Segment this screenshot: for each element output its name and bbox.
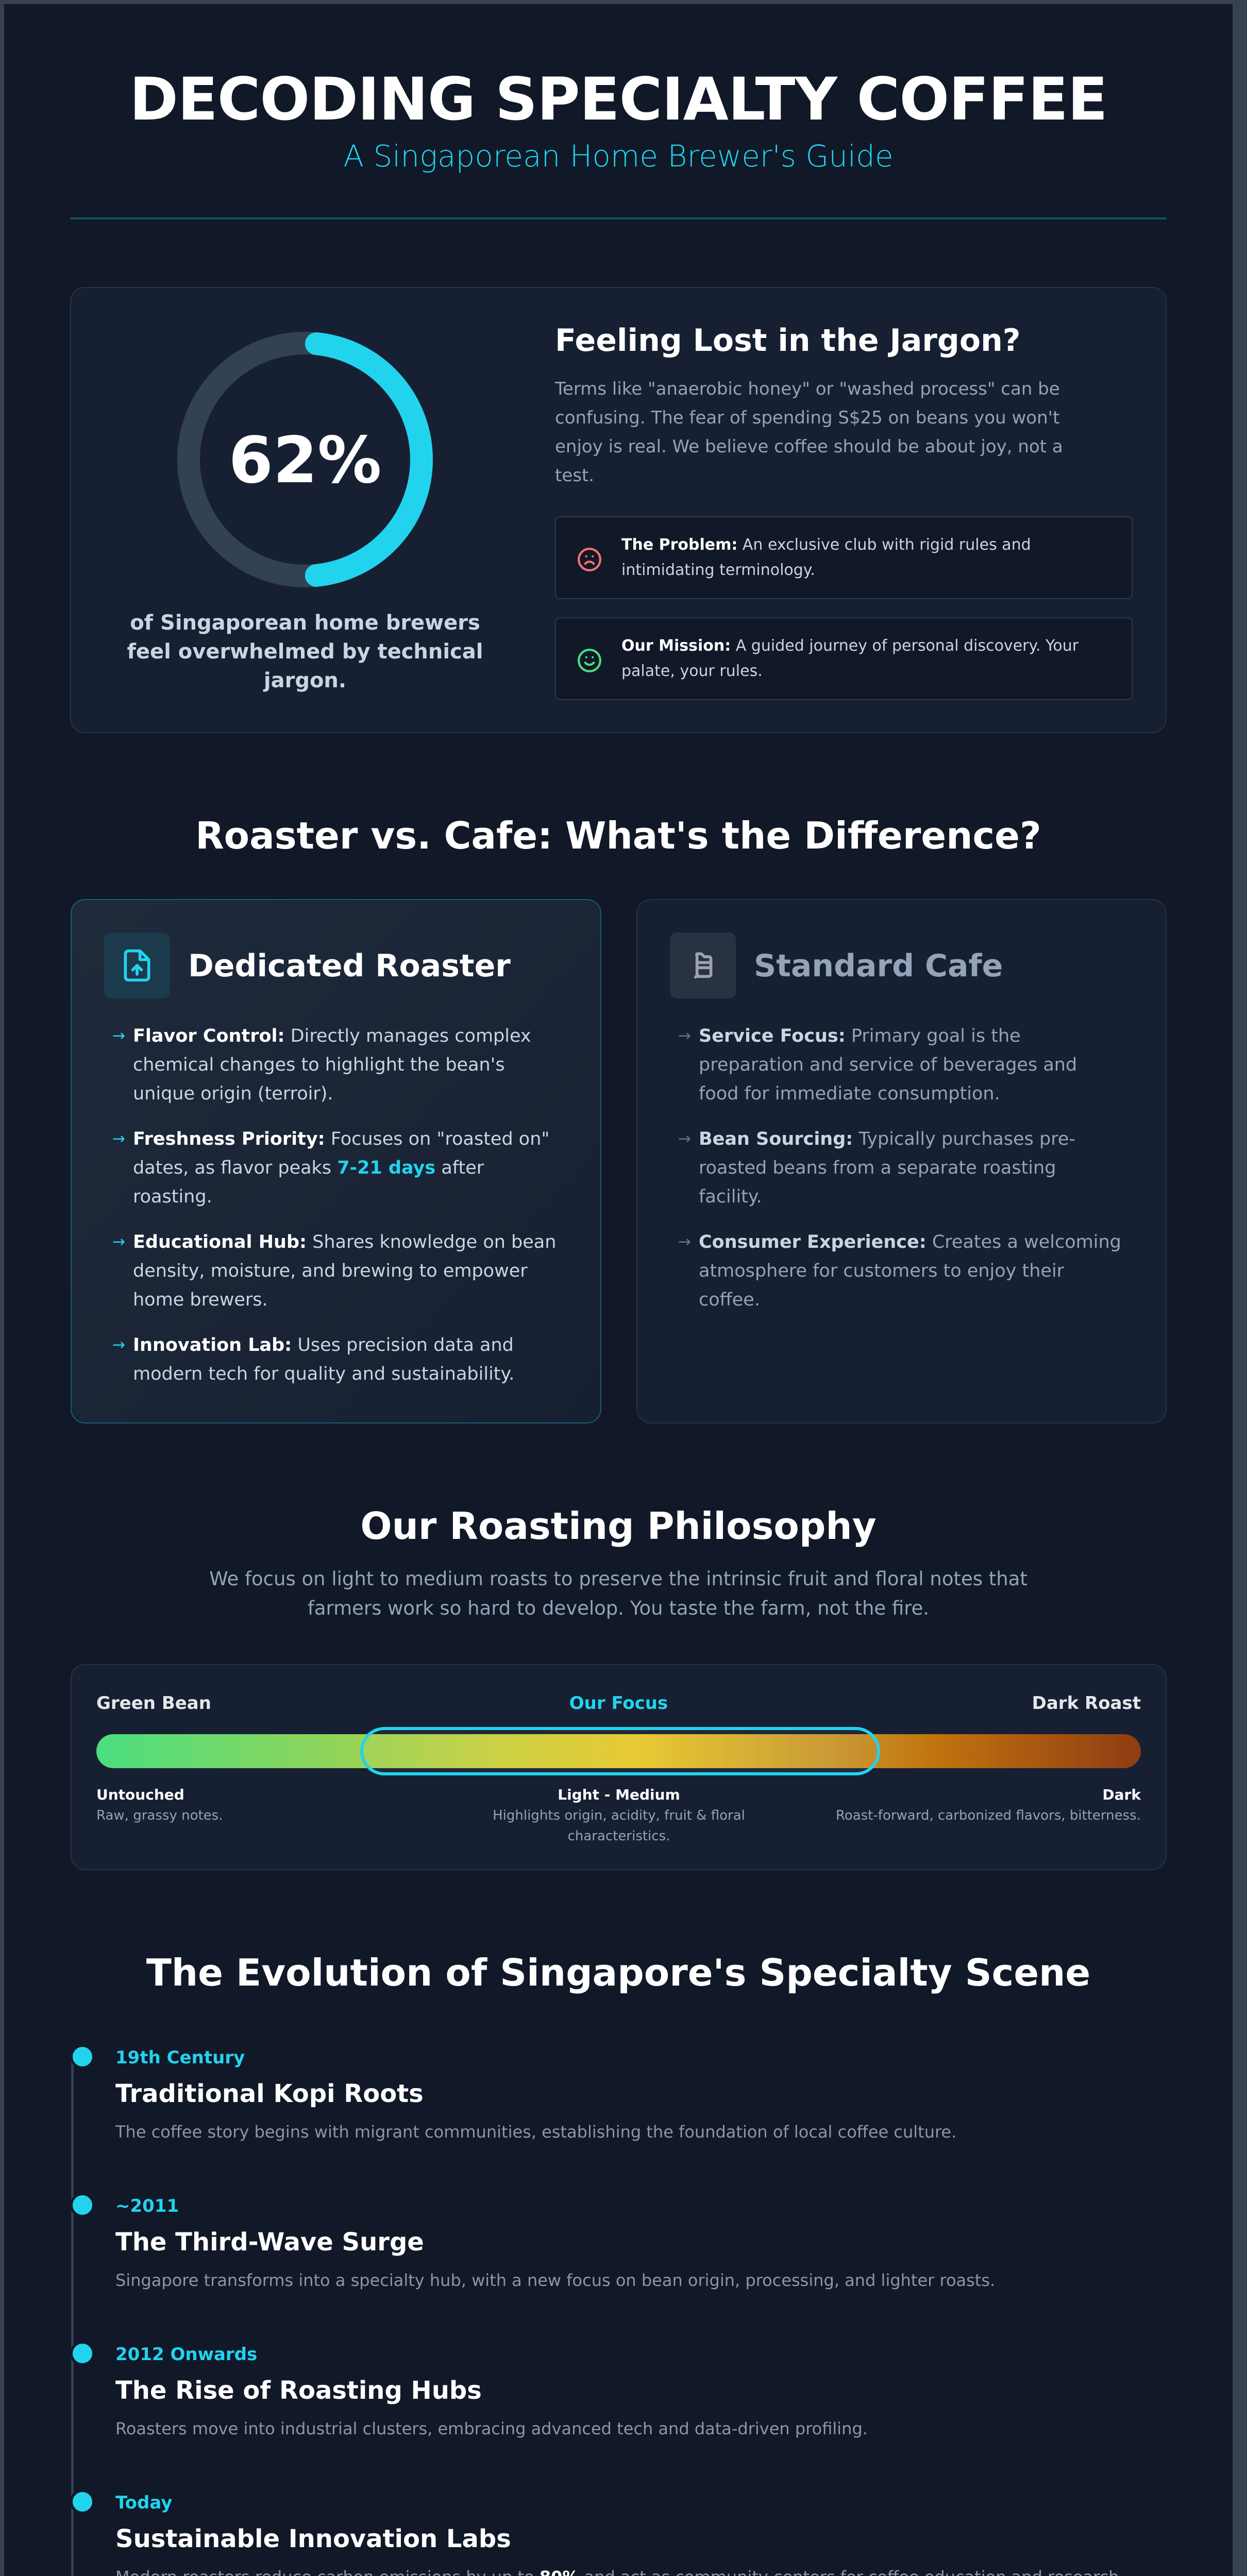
panel: dedicated roaster xyxy=(71,899,601,1423)
label: dark: Roast-forward, carbonized flavors, bitterness. xyxy=(836,1808,1141,1823)
cafe bullet list: atmosphere for customers to enjoy their xyxy=(699,1261,1064,1281)
label: untouched: Untouched xyxy=(96,1786,184,1803)
cafe bullet list: facility. xyxy=(699,1187,762,1207)
panel: jargon stats xyxy=(70,287,1167,733)
timeline item: 19th century xyxy=(71,2047,956,2142)
timeline xyxy=(71,2047,1124,2576)
heading: roasting philosophy: Our Roasting Philosophy xyxy=(360,1504,877,1548)
stat caption: of Singaporean home brewers feel overwhelmed by technical jargon. xyxy=(127,611,483,692)
heading: dedicated roaster: Dedicated Roaster xyxy=(188,948,511,984)
roaster bullet list: Freshness Priority: Focuses on "roasted on" dates, as flavor peaks 7-21 days after roasting. xyxy=(133,1129,549,1207)
cafe bullet list: Bean Sourcing: Typically purchases pre- xyxy=(699,1129,1075,1149)
cafe bullet list: → xyxy=(678,1233,691,1251)
label: untouched: Raw, grassy notes. xyxy=(96,1808,223,1823)
cafe bullet list: → xyxy=(678,1027,691,1045)
timeline item: 2012 onwards: 2012 Onwards xyxy=(115,2344,257,2365)
timeline item: 2011: ~2011 xyxy=(115,2196,179,2216)
heading: evolution: The Evolution of Singapore's Specialty Scene xyxy=(146,1951,1090,1994)
roaster bullet list xyxy=(112,1026,556,1384)
roaster bullet list: → xyxy=(112,1027,125,1045)
cafe bullet list: coffee. xyxy=(699,1290,760,1310)
roaster bullet list: Innovation Lab: Uses precision data and modern tech for quality and sustainability. xyxy=(133,1335,514,1384)
label: dark xyxy=(836,1786,1141,1823)
roaster bullet list: Flavor Control: Directly manages complex chemical changes to highlight the bean's unique origin (terroir). xyxy=(133,1026,531,1104)
donut chart 62% xyxy=(177,332,433,587)
label: untouched xyxy=(96,1786,223,1823)
icon: sad face xyxy=(578,548,601,571)
callout: mission: Our Mission: A guided journey of personal discovery. Your palate, your rules. xyxy=(621,637,1079,680)
timeline item: 2012 onwards xyxy=(71,2344,868,2438)
cafe bullet list xyxy=(678,1026,1121,1310)
callout: mission xyxy=(555,617,1133,700)
timeline item: 2011: Singapore transforms into a specialty hub, with a new focus on bean origin, processing, and lighter roasts. xyxy=(115,2270,995,2290)
icon: smile face xyxy=(578,649,601,672)
subtitle: A Singaporean Home Brewer's Guide xyxy=(343,139,894,174)
cafe bullet list: roasted beans from a separate roasting xyxy=(699,1158,1056,1178)
spectrum labels: Our Focus xyxy=(569,1693,668,1714)
roaster bullet list: Educational Hub: Shares knowledge on bean density, moisture, and brewing to empower home brewers. xyxy=(133,1232,556,1310)
timeline item: 2011 xyxy=(71,2195,995,2290)
spectrum labels xyxy=(96,1693,1141,1714)
timeline item: 2011: The Third-Wave Surge xyxy=(115,2228,424,2257)
timeline item: today xyxy=(71,2492,1124,2576)
label: light-medium xyxy=(493,1786,745,1844)
roast gradient bar xyxy=(96,1734,1141,1768)
timeline item: 2012 onwards: The Rise of Roasting Hubs xyxy=(115,2376,482,2405)
cafe bullet list: food for immediate consumption. xyxy=(699,1083,1000,1104)
icon: file text xyxy=(670,933,736,998)
heading: feeling lost: Feeling Lost in the Jargon? xyxy=(555,323,1021,359)
heading: roaster vs cafe: Roaster vs. Cafe: What's the Difference? xyxy=(195,814,1041,857)
spectrum labels: Green Bean xyxy=(96,1693,211,1714)
callout: problem xyxy=(555,516,1133,599)
label: light-medium: Light - Medium xyxy=(558,1786,680,1803)
callout: problem: The Problem: An exclusive club with rigid rules and intimidating terminology. xyxy=(621,536,1031,579)
intro text: Terms like "anaerobic honey" or "washed process" can be confusing. The fear of spending S$25 on beans you won't enjoy is real. We believe coffee should be about joy, not a test. xyxy=(555,379,1063,486)
panel: standard cafe xyxy=(636,899,1167,1423)
spectrum labels: Dark Roast xyxy=(1032,1693,1141,1714)
donut chart 62%: 62% xyxy=(229,423,381,498)
timeline item: 19th century: 19th Century xyxy=(115,2047,245,2068)
icon: file upload xyxy=(104,933,170,998)
label: light-medium: Highlights origin, acidity, fruit & floral characteristics. xyxy=(493,1808,745,1844)
timeline item: 19th century: The coffee story begins with migrant communities, establishing the foundation of local coffee culture. xyxy=(115,2122,956,2142)
roaster bullet list: → xyxy=(112,1233,125,1251)
cafe bullet list: → xyxy=(678,1130,691,1148)
roaster bullet list: → xyxy=(112,1130,125,1148)
timeline item: today: Today xyxy=(115,2493,172,2513)
timeline item: today: Sustainable Innovation Labs xyxy=(115,2524,511,2553)
heading: standard cafe: Standard Cafe xyxy=(754,948,1003,984)
timeline item: 2012 onwards: Roasters move into industrial clusters, embracing advanced tech and data-driven profiling. xyxy=(115,2419,868,2438)
cafe bullet list: preparation and service of beverages and xyxy=(699,1055,1077,1075)
focus highlight ring xyxy=(360,1727,880,1775)
timeline item: 19th century: Traditional Kopi Roots xyxy=(115,2079,424,2108)
cafe bullet list: Consumer Experience: Creates a welcoming xyxy=(699,1232,1121,1252)
cafe bullet list: Service Focus: Primary goal is the xyxy=(699,1026,1021,1046)
panel: roast spectrum xyxy=(71,1664,1167,1870)
roasting intro text: We focus on light to medium roasts to preserve the intrinsic fruit and floral notes that farmers work so hard to develop. You taste the farm, not the fire. xyxy=(209,1568,1027,1619)
label: dark: Dark xyxy=(1102,1786,1141,1803)
title: DECODING SPECIALTY COFFEE xyxy=(129,65,1107,133)
roaster bullet list: → xyxy=(112,1336,125,1354)
